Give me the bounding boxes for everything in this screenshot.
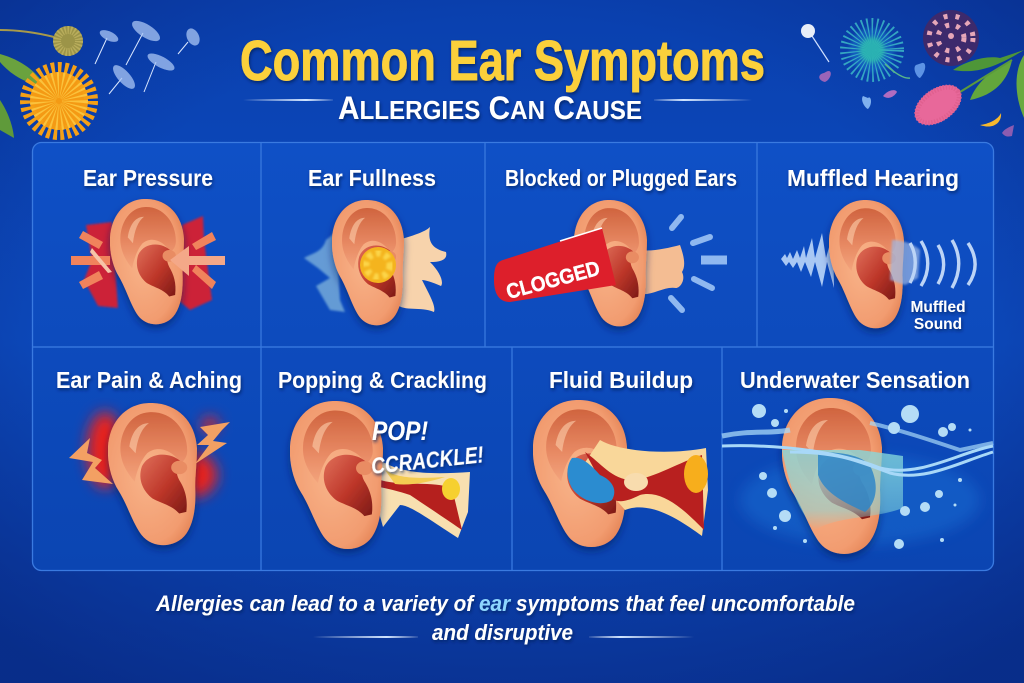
pop crackle text: POP!: [372, 416, 428, 446]
pop crackle text: CCRACKLE!: [370, 441, 485, 479]
ear: [110, 199, 184, 324]
ear: [290, 401, 383, 549]
pop crackle text: [370, 416, 485, 479]
leaves: [953, 50, 1024, 118]
water waves: [722, 423, 993, 475]
tan splash: [396, 227, 446, 312]
decoration: top-left flowers and seeds: [0, 17, 202, 138]
clogged label: [494, 228, 616, 304]
muffled sound label: Sound: [914, 316, 962, 333]
heading: Blocked or Plugged Ears: [505, 165, 737, 191]
ear: [108, 403, 197, 545]
subtitle: ALLERGIES CAN CAUSE: [338, 90, 642, 126]
ear: [533, 400, 627, 547]
teal burst flower: [850, 28, 910, 78]
ear: [332, 200, 404, 325]
water over ear: [782, 450, 903, 530]
panel: ear pain and aching: [56, 367, 242, 545]
bubbles: [752, 404, 972, 549]
pale splash: [304, 232, 345, 312]
heading: Ear Pressure: [83, 165, 213, 191]
ear: [574, 200, 647, 326]
floating seeds: [95, 17, 202, 94]
sound wave left: [781, 233, 834, 288]
panel: fluid buildup: [533, 367, 708, 547]
petals: [819, 63, 1014, 137]
heading: Popping & Crackling: [278, 367, 487, 393]
pink cluster flower: [923, 10, 979, 66]
stem and seed head: [0, 26, 83, 56]
title: Common Ear Symptoms: [240, 29, 765, 93]
panel: popping and crackling: [278, 367, 487, 549]
decoration: top-right flowers and petals: [801, 10, 1024, 137]
underwater glow: [740, 455, 980, 545]
tan plug: [640, 245, 684, 294]
orange dandelion: [27, 69, 91, 133]
ear tube: [368, 450, 470, 538]
yellow sac: [684, 455, 708, 493]
ear canal cross-section: [568, 440, 708, 536]
pink fuzzy flower: [908, 77, 968, 133]
heading: Fluid Buildup: [549, 367, 693, 393]
sound arcs right: [910, 240, 975, 288]
panel: muffled hearing: [781, 165, 975, 333]
panel: ear fullness: [304, 165, 446, 325]
heading: Underwater Sensation: [740, 367, 970, 393]
blue fluid: [568, 458, 614, 503]
muffled haze: [890, 240, 920, 285]
leaves: [0, 54, 44, 138]
dandelion seed: [801, 24, 829, 62]
heading: Ear Fullness: [308, 165, 436, 191]
yellow blockage: [360, 247, 396, 283]
panel: ear pressure: [71, 165, 225, 324]
footer caption: and disruptive: [432, 620, 573, 645]
burst dashes: [671, 217, 727, 310]
footer caption: Allergies can lead to a variety of ear symptoms that feel uncomfortable: [155, 591, 855, 616]
footer caption: [155, 591, 855, 645]
panel: underwater sensation: [722, 367, 993, 554]
pressure arrows: [71, 231, 225, 289]
ear: [782, 398, 882, 554]
heading: Ear Pain & Aching: [56, 367, 242, 393]
ear: [829, 200, 904, 328]
symptom grid frame: [32, 142, 994, 570]
red pain glow: [87, 412, 218, 497]
heading: Muffled Hearing: [787, 165, 959, 191]
muffled sound label: Muffled: [910, 299, 966, 316]
panel: blocked or plugged ears: [494, 165, 737, 326]
clogged label: CLOGGED: [504, 257, 602, 304]
pressure glow: [84, 216, 212, 310]
lightning bolts: [69, 422, 230, 484]
